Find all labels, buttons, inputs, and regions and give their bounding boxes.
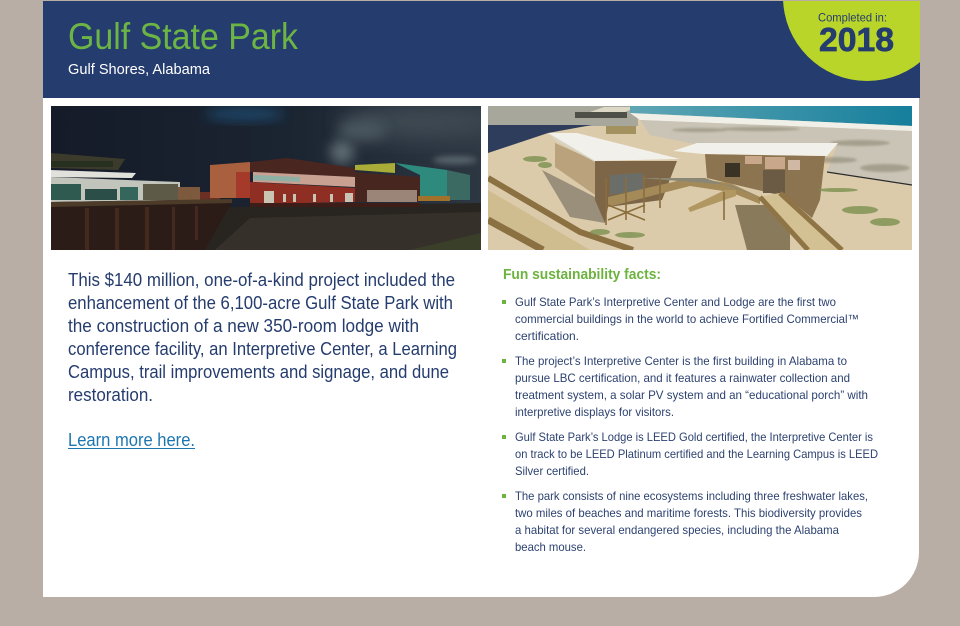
plantings bbox=[523, 156, 900, 238]
red lodge building bbox=[210, 162, 250, 198]
boardwalk left bbox=[488, 190, 590, 250]
intro paragraph: the construction of a new 350-room lodge with bbox=[68, 316, 419, 336]
subtitle: Gulf Shores, Alabama bbox=[68, 61, 211, 78]
boardwalk bbox=[51, 202, 232, 250]
intro paragraph bbox=[68, 270, 457, 405]
fact 4: beach mouse. bbox=[515, 540, 586, 554]
fact 3: Silver certified. bbox=[515, 464, 589, 478]
fact 4 bbox=[502, 489, 868, 554]
ramp right bbox=[760, 193, 842, 250]
photo: interpretive center on the beach bbox=[488, 106, 912, 250]
fact 1 bbox=[502, 295, 859, 343]
building two bbox=[705, 154, 825, 218]
photo: lodge at night bbox=[51, 106, 500, 250]
link: learn more: Learn more here. bbox=[68, 430, 195, 450]
decks and stairs bbox=[608, 178, 760, 207]
sea and beach bbox=[630, 106, 912, 126]
fact 4: a habitat for several endangered species, including the Alabama bbox=[515, 523, 839, 537]
beach foreground bbox=[195, 203, 481, 250]
facts heading: Fun sustainability facts: bbox=[503, 266, 661, 283]
fact 2: The project’s Interpretive Center is the first building in Alabama to bbox=[515, 354, 847, 368]
intro paragraph: Campus, trail improvements and signage, and dune bbox=[68, 362, 449, 382]
fact 4: two miles of beaches and maritime forests. This biodiversity provides bbox=[515, 506, 862, 520]
fact 3: on track to be LEED Platinum certified and the Learning Campus is LEED bbox=[515, 447, 878, 461]
fact 2 bbox=[502, 354, 868, 419]
intro paragraph: restoration. bbox=[68, 385, 153, 405]
left pavilion bbox=[51, 153, 125, 170]
completion badge: Completed in: bbox=[818, 10, 887, 24]
fact 2: interpretive displays for visitors. bbox=[515, 405, 674, 419]
intro paragraph: enhancement of the 6,100-acre Gulf State Park with bbox=[68, 293, 453, 313]
parking lot bbox=[488, 125, 592, 153]
intro paragraph: conference facility, an Interpretive Center, a Learning bbox=[68, 339, 457, 359]
fact 4: The park consists of nine ecosystems including three freshwater lakes, bbox=[515, 489, 868, 503]
completion badge: 2018 bbox=[819, 21, 894, 58]
completion badge bbox=[783, 1, 920, 81]
header banner bbox=[43, 0, 951, 98]
upper left shore buildings bbox=[488, 106, 638, 126]
fact 3 bbox=[502, 430, 878, 478]
fact 2: treatment system, a solar PV system and an “educational porch” with bbox=[515, 388, 868, 402]
fact 2: pursue LBC certification, and it features a rainwater collection and bbox=[515, 371, 850, 385]
fact 3: Gulf State Park’s Lodge is LEED Gold certified, the Interpretive Center is bbox=[515, 430, 873, 444]
fact 1: commercial buildings in the world to achieve Fortified Commercial™ bbox=[515, 312, 859, 326]
intro paragraph: This $140 million, one-of-a-kind project included the bbox=[68, 270, 455, 290]
facts list bbox=[502, 295, 878, 554]
title: Gulf State Park bbox=[68, 16, 298, 57]
fact 1: certification. bbox=[515, 329, 579, 343]
shadow bbox=[542, 170, 605, 223]
building one bbox=[555, 143, 595, 195]
fact 1: Gulf State Park’s Interpretive Center and Lodge are the first two bbox=[515, 295, 836, 309]
